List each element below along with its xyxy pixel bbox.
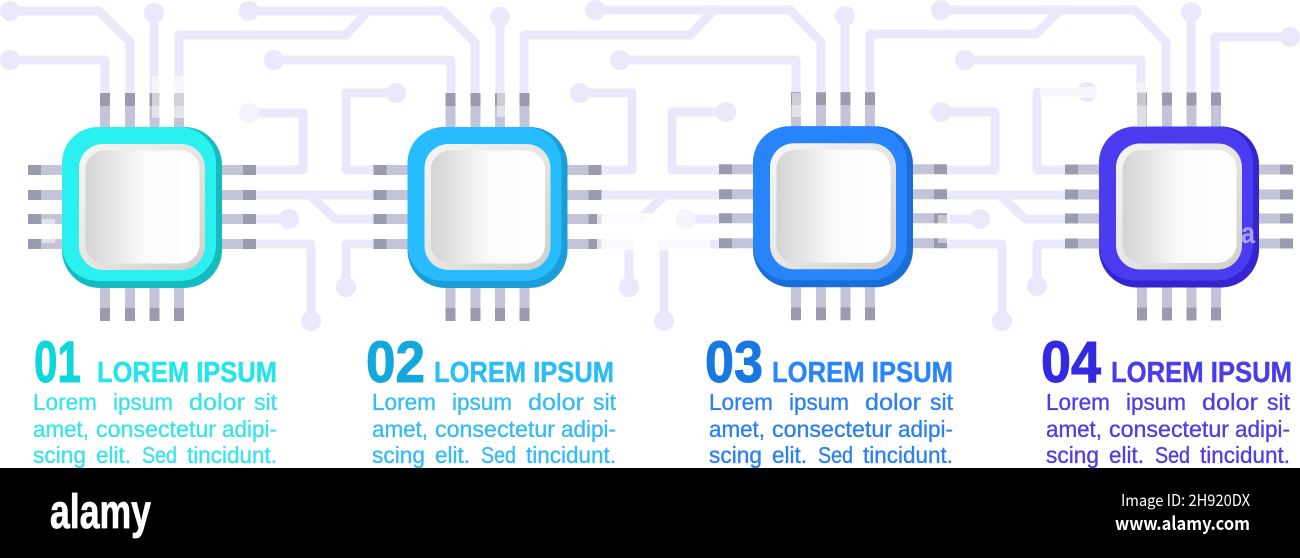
- step 1 body: consectetur: [96, 416, 216, 442]
- step 1 body: dolor: [189, 389, 245, 415]
- step 1 body: scing: [33, 442, 86, 468]
- chip 1: [28, 93, 256, 321]
- step 4 body: amet,: [1046, 416, 1102, 442]
- step 3 body: dolor: [865, 389, 921, 415]
- step 4 body: Sed: [1155, 442, 1190, 468]
- step 2 body: ipsum: [452, 389, 512, 415]
- step 2 body: elit.: [435, 442, 470, 468]
- step 4 text: [1041, 330, 1292, 468]
- circuit traces: [0, 0, 1300, 331]
- step 2 body: dolor: [528, 389, 584, 415]
- step 2 body: amet,: [372, 416, 428, 442]
- step 4 body: dolor: [1202, 389, 1258, 415]
- step 4 number: 04: [1041, 330, 1101, 395]
- step 3 body: Lorem: [709, 389, 773, 415]
- step 2 body: adipi-: [561, 416, 616, 442]
- step 4 body: Lorem: [1046, 389, 1110, 415]
- step 3 heading: LOREM IPSUM: [772, 357, 953, 389]
- step 3 body: Sed: [818, 442, 853, 468]
- step 2 body: Lorem: [372, 389, 436, 415]
- step 2 body: sit: [593, 389, 617, 415]
- step 2 text: [366, 330, 617, 468]
- step 1 body: tincidunt.: [187, 442, 277, 468]
- step 2 number: 02: [366, 330, 425, 395]
- watermark footer band: [0, 468, 1300, 558]
- chip 2: [374, 93, 602, 321]
- step 4 body: sit: [1267, 389, 1291, 415]
- step 2 heading: LOREM IPSUM: [434, 357, 614, 389]
- step 3 body: adipi-: [898, 416, 953, 442]
- chip 4: [1065, 92, 1293, 320]
- step 2 body: scing: [372, 442, 425, 468]
- step 1 body: sit: [254, 389, 278, 415]
- step 1 body: [33, 389, 278, 468]
- step 3 body: consectetur: [772, 416, 892, 442]
- step 4 body: consectetur: [1109, 416, 1229, 442]
- step 1 body: ipsum: [113, 389, 173, 415]
- step 4 body: [1046, 389, 1291, 468]
- step 3 body: [709, 389, 954, 468]
- step 2 body: tincidunt.: [526, 442, 616, 468]
- image id: Image ID: 2H920DX: [1121, 487, 1250, 511]
- step 2 body: consectetur: [435, 416, 555, 442]
- step 3 body: ipsum: [789, 389, 849, 415]
- step 1 heading: LOREM IPSUM: [97, 357, 277, 389]
- step 1 body: elit.: [96, 442, 131, 468]
- step 2 body: Sed: [481, 442, 516, 468]
- step 1 body: Lorem: [33, 389, 97, 415]
- step 1 body: amet,: [33, 416, 89, 442]
- step 4 body: tincidunt.: [1200, 442, 1290, 468]
- chip 3: [719, 92, 947, 320]
- step 1 number: 01: [34, 330, 81, 395]
- step 3 body: elit.: [772, 442, 807, 468]
- step 3 body: sit: [930, 389, 954, 415]
- website: www.alamy.com: [1115, 510, 1250, 536]
- step 1 body: Sed: [142, 442, 177, 468]
- step 4 body: ipsum: [1126, 389, 1186, 415]
- step 4 body: elit.: [1109, 442, 1144, 468]
- step 3 body: scing: [709, 442, 762, 468]
- step 3 number: 03: [705, 330, 763, 395]
- step 4 body: adipi-: [1235, 416, 1290, 442]
- step 1 text: [33, 330, 278, 468]
- faded watermark patches: [42, 76, 1146, 250]
- step 4 body: scing: [1046, 442, 1099, 468]
- step 2 body: [372, 389, 617, 468]
- alamy logo: alamy: [50, 486, 151, 539]
- step 1 body: adipi-: [222, 416, 277, 442]
- step 3 body: amet,: [709, 416, 765, 442]
- step 3 body: tincidunt.: [863, 442, 953, 468]
- watermark letter on chip 4: a: [1241, 217, 1255, 250]
- step 3 text: [705, 330, 954, 468]
